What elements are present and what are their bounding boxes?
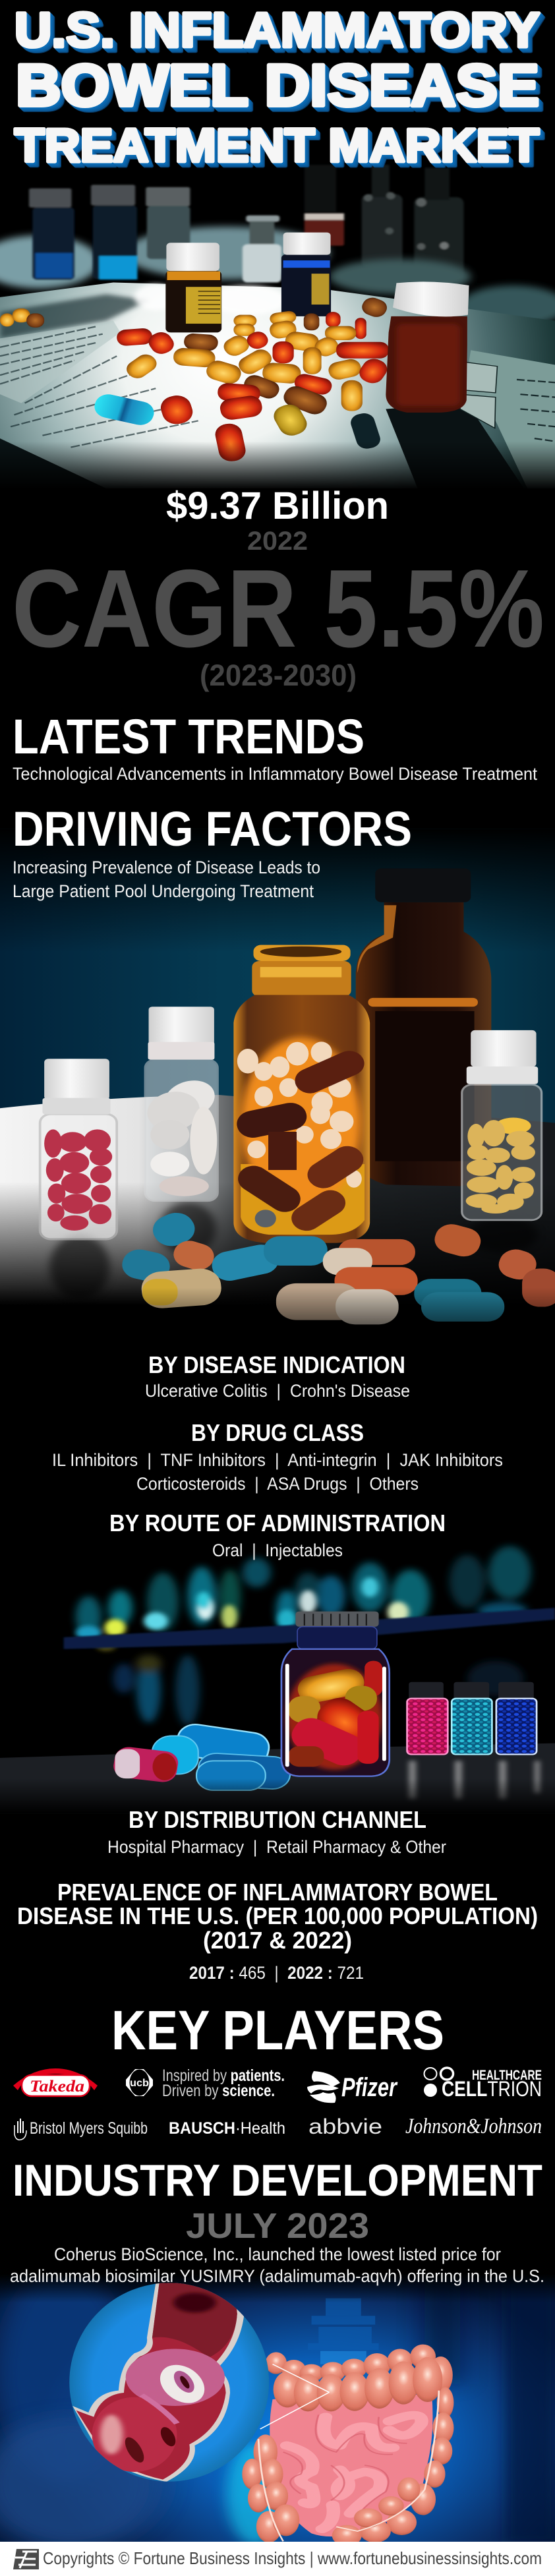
forecast period: (2023-2030) xyxy=(200,659,357,692)
large dark amber bottle xyxy=(356,868,491,1186)
logo: Celltrion Healthcare: CELLTRION xyxy=(442,2077,542,2101)
yellow tablet bottle xyxy=(462,1030,542,1220)
small intestine xyxy=(270,2394,432,2536)
left paper shadow and lines xyxy=(0,294,149,338)
development date: JULY 2023 xyxy=(186,2206,369,2246)
photo: glowing capsule jar xyxy=(0,1546,555,1849)
by drug class: BY DRUG CLASS xyxy=(191,1419,364,1446)
development description: Coherus BioScience, Inc., launched the lowest listed price for xyxy=(54,2244,501,2264)
driving factors heading: DRIVING FACTORS xyxy=(13,802,412,856)
white balls in jar xyxy=(237,1041,362,1188)
logo: Celltrion Healthcare xyxy=(424,2068,542,2101)
cyan capsule xyxy=(92,392,157,428)
logo: Pfizer xyxy=(307,2071,398,2103)
back blue bottles xyxy=(29,185,344,283)
teal backdrop xyxy=(0,829,555,1152)
spine xyxy=(308,2298,379,2364)
footer band xyxy=(0,2542,555,2576)
by drug class xyxy=(52,1419,503,1494)
base year: 2022 xyxy=(247,527,308,556)
logo: Pfizer: Pfizer xyxy=(341,2073,398,2102)
by route of administration: BY ROUTE OF ADMINISTRATION xyxy=(109,1509,446,1537)
logo: UCB: Driven by science. xyxy=(162,2082,275,2100)
by route of administration: Oral | Injectables xyxy=(212,1540,343,1560)
prevalence heading: (2017 & 2022) xyxy=(203,1927,352,1954)
large intestine colon xyxy=(242,2345,453,2546)
reflections xyxy=(409,1761,540,1799)
footer logo xyxy=(13,2549,39,2569)
driving factors text xyxy=(13,858,320,901)
market value: $9.37 Billion xyxy=(166,484,389,527)
logo: Takeda: Takeda xyxy=(30,2078,84,2095)
red tablet bottle xyxy=(40,1059,117,1239)
intestine illustration xyxy=(0,2263,555,2549)
amber bottle with white cap xyxy=(386,281,469,413)
colon band lines xyxy=(258,2391,439,2541)
title: BOWEL DISEASE xyxy=(16,52,539,118)
driving factors text: Increasing Prevalence of Disease Leads to xyxy=(13,858,320,877)
by distribution channel xyxy=(107,1806,446,1857)
bottle shadows xyxy=(49,1202,538,1299)
hero photo: medicine bottles and capsules on papers xyxy=(0,165,555,490)
amber capsules pile xyxy=(0,295,392,463)
shelf xyxy=(64,1608,555,1649)
blue body backdrop xyxy=(0,2274,555,2542)
bottle with yellow label xyxy=(165,243,221,332)
title: TREATMENT MARKET xyxy=(15,120,539,172)
by route of administration xyxy=(109,1509,446,1560)
table xyxy=(0,1095,555,1305)
central amber jar xyxy=(233,945,370,1243)
logo: Takeda xyxy=(13,2068,98,2096)
table capsules xyxy=(119,1208,555,1324)
prevalence heading xyxy=(17,1879,538,1954)
by drug class: Corticosteroids | ASA Drugs | Others xyxy=(136,1474,419,1494)
blurred shelf lights xyxy=(76,1546,531,1637)
by distribution channel: BY DISTRIBUTION CHANNEL xyxy=(129,1806,426,1833)
by disease indication: Ulcerative Colitis | Crohn's Disease xyxy=(145,1381,410,1401)
central jar xyxy=(281,1612,390,1776)
bright table highlights xyxy=(134,284,177,310)
dark corners xyxy=(0,438,106,488)
logo: UCB: Inspired by patients. xyxy=(162,2066,285,2085)
background lab glassware xyxy=(305,165,463,279)
driving factors text: Large Patient Pool Undergoing Treatment xyxy=(13,881,314,901)
bottle with blue band xyxy=(281,233,331,316)
logo: Bristol Myers Squibb xyxy=(15,2119,148,2140)
logo: UCB xyxy=(126,2066,285,2100)
logo: Bristol Myers Squibb: Bristol Myers Squibb xyxy=(30,2119,148,2138)
clear bottle with white tablets xyxy=(140,1007,223,1201)
by disease indication xyxy=(145,1351,410,1401)
logo: AbbVie: abbvie xyxy=(308,2115,382,2138)
floor xyxy=(0,1743,555,1846)
small colored jars xyxy=(407,1682,537,1755)
title: U.S. INFLAMMATORY xyxy=(15,3,540,57)
magnified circle xyxy=(69,2283,329,2482)
logo: UCB: ucb xyxy=(130,2078,149,2089)
hero top/bottom fades xyxy=(0,442,555,490)
by disease indication: BY DISEASE INDICATION xyxy=(148,1351,405,1378)
photo: pill bottles on table xyxy=(0,829,555,1391)
back table glow xyxy=(0,227,555,327)
blue capsules xyxy=(111,1722,291,1790)
title xyxy=(15,3,540,172)
prevalence heading: PREVALENCE OF INFLAMMATORY BOWEL xyxy=(57,1879,498,1906)
dark capsules in jar xyxy=(232,1047,370,1236)
by drug class: IL Inhibitors | TNF Inhibitors | Anti-integrin | JAK Inhibitors xyxy=(52,1450,503,1470)
bottom fade xyxy=(0,1288,555,1355)
prevalence values: 2017 : 465 | 2022 : 721 xyxy=(189,1963,364,1983)
table with papers xyxy=(0,283,555,488)
top fade xyxy=(0,2274,555,2302)
key players heading: KEY PLAYERS xyxy=(111,1999,444,2061)
floor fade xyxy=(0,1778,555,1814)
latest trends heading: LATEST TRENDS xyxy=(13,709,365,764)
by distribution channel: Hospital Pharmacy | Retail Pharmacy & Other xyxy=(107,1837,446,1857)
development description xyxy=(10,2244,544,2286)
logo: Bausch Health: BAUSCH·Health xyxy=(169,2119,285,2138)
